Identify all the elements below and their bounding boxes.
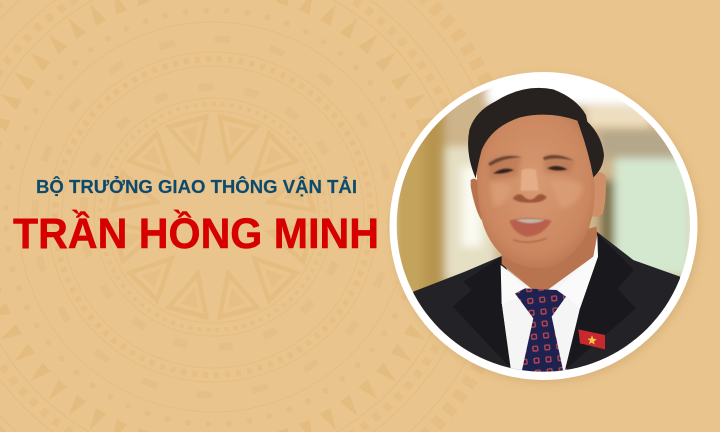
ears xyxy=(591,172,606,217)
heading: position: BỘ TRƯỞNG GIAO THÔNG VẬN TẢI xyxy=(36,176,357,197)
neck xyxy=(502,227,597,292)
portrait photo xyxy=(396,88,690,372)
cheek highlights xyxy=(490,181,582,207)
heading: name: TRẦN HỒNG MINH xyxy=(13,209,379,258)
shirt collar xyxy=(501,235,598,308)
necktie xyxy=(515,288,566,372)
lapels xyxy=(453,232,636,370)
lapel pin xyxy=(578,329,605,349)
photo background xyxy=(393,77,693,377)
portrait frame xyxy=(390,72,698,380)
brow and eye shading xyxy=(489,158,574,178)
shirt xyxy=(502,252,598,372)
face xyxy=(477,114,595,268)
portrait shadow xyxy=(393,76,699,382)
facial features xyxy=(488,155,583,242)
suit xyxy=(413,232,680,372)
hair xyxy=(468,88,604,178)
